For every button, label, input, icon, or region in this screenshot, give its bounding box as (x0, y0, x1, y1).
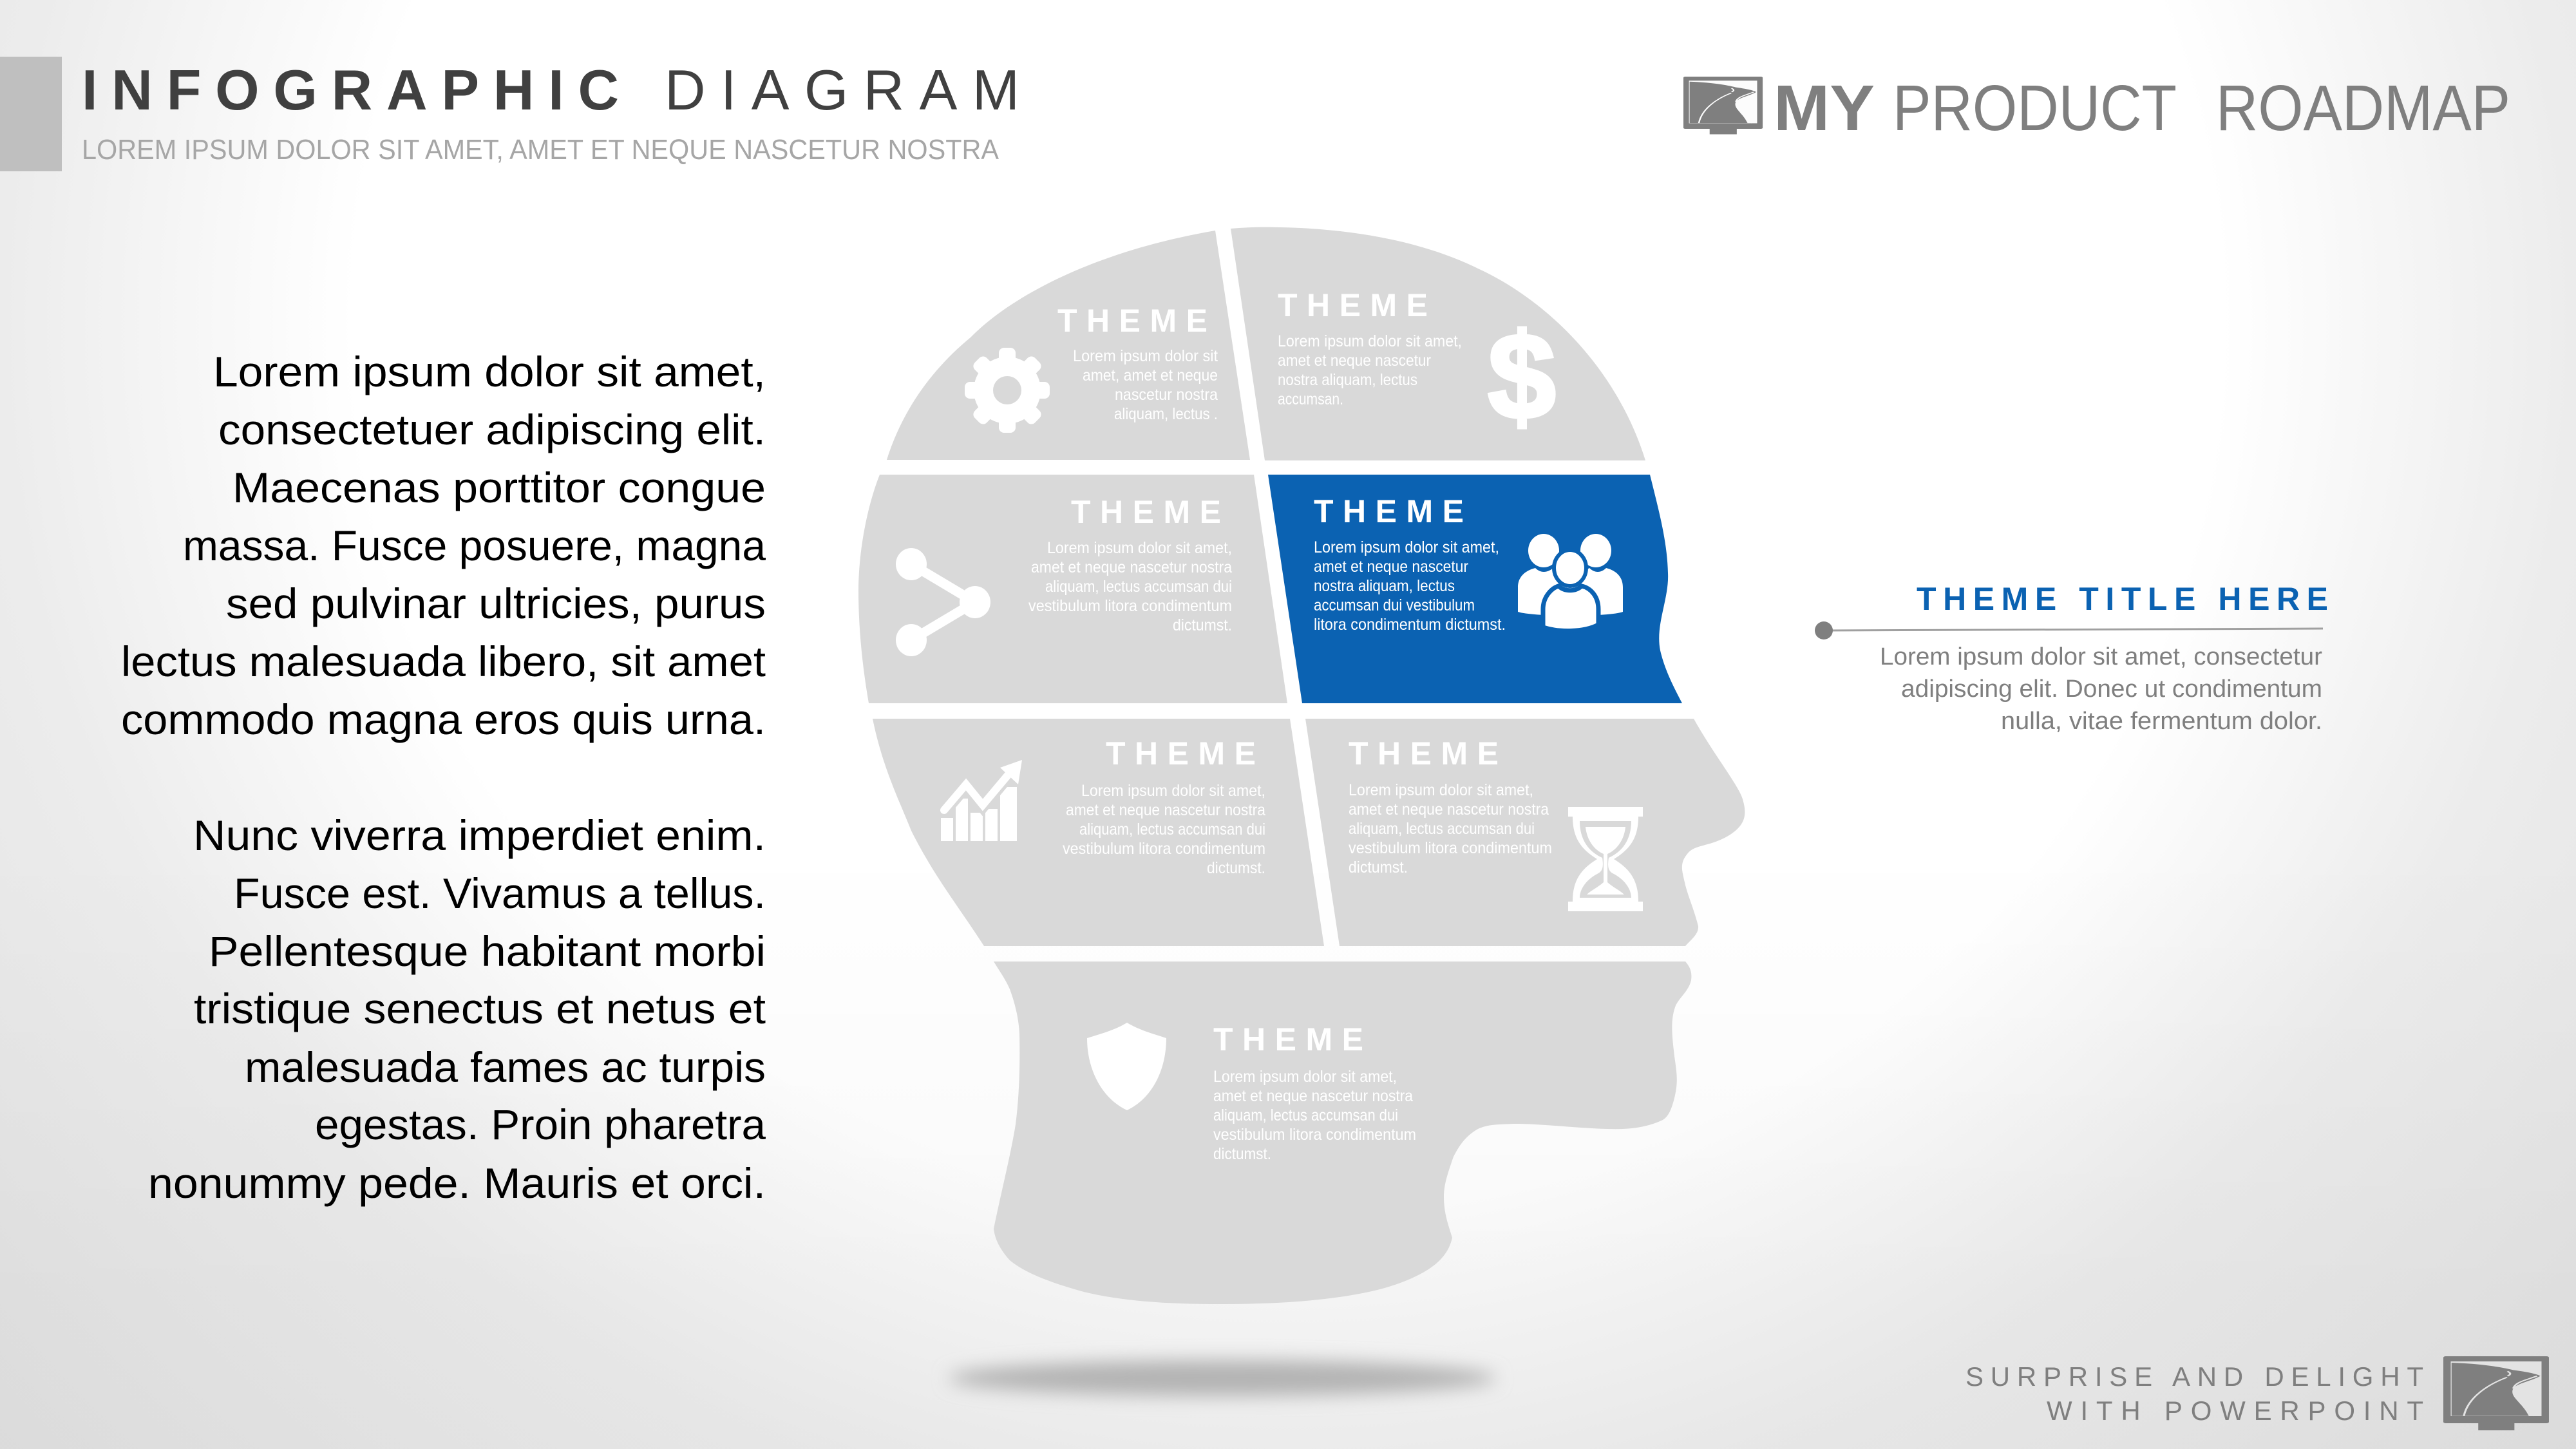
left text block: Fusce est. Vivamus a tellus. (234, 869, 766, 917)
title: DIAGRAM (665, 58, 1019, 122)
body text (1073, 347, 1218, 423)
body text (1028, 539, 1232, 634)
heading: THEME (1106, 735, 1256, 772)
left text block: malesuada fames ac turpis (245, 1043, 766, 1091)
body text: Lorem ipsum dolor sit amet, (1349, 781, 1533, 799)
callout connector (1815, 621, 2323, 639)
panel: theme share (858, 475, 1287, 703)
logo wordmark: PRODUCT (1893, 72, 2177, 144)
title (82, 58, 1019, 122)
body text: amet et neque nascetur nostra (1031, 558, 1232, 576)
left text block: Nunc viverra imperdiet enim. (193, 811, 766, 859)
body text: vestibulum litora condimentum (1063, 840, 1265, 858)
left text block: nonummy pede. Mauris et orci. (148, 1159, 766, 1207)
footer icon: road billboard (2443, 1356, 2549, 1430)
segment: middle right blue (1268, 475, 1682, 703)
body text: dictumst. (1173, 616, 1232, 634)
icon: gear (965, 348, 1050, 433)
body text: amet et neque nascetur (1314, 558, 1468, 576)
body text: Lorem ipsum dolor sit amet, (1081, 782, 1265, 800)
body text (1213, 1068, 1416, 1163)
heading: THEME (1057, 303, 1208, 339)
panel: theme gear (887, 231, 1250, 460)
logo: my product roadmap (1683, 72, 2510, 144)
body text: Lorem ipsum dolor sit amet, (1047, 539, 1232, 557)
footer tagline: SURPRISE AND DELIGHT (1965, 1361, 2423, 1392)
left text block: Lorem ipsum dolor sit amet, (213, 348, 766, 395)
left text block: massa. Fusce posuere, magna (183, 522, 766, 569)
body text: amet et neque nascetur (1278, 352, 1431, 370)
body text: nascetur nostra (1115, 386, 1218, 404)
body text: dictumst. (1207, 859, 1265, 877)
body text: Lorem ipsum dolor sit (1073, 347, 1218, 365)
heading: THEME (1314, 493, 1464, 529)
callout body text: adipiscing elit. Donec ut condimentum (1901, 676, 2322, 703)
segment: middle left (858, 475, 1287, 703)
body text (1349, 781, 1552, 876)
heading: THEME (1349, 735, 1499, 772)
segment: lower left (873, 719, 1324, 946)
callout body text: nulla, vitae fermentum dolor. (2001, 708, 2322, 735)
icon: growth chart (941, 760, 1022, 841)
body text: vestibulum litora condimentum (1213, 1126, 1416, 1144)
left text block: Pellentesque habitant morbi (209, 927, 766, 975)
left text block: tristique senectus et netus et (194, 985, 766, 1032)
panel: theme people (highlighted) (1268, 475, 1682, 703)
heading: THEME (1213, 1021, 1363, 1057)
body text: vestibulum litora condimentum (1349, 839, 1552, 857)
left text block: Maecenas porttitor congue (232, 464, 766, 511)
left text block: lectus malesuada libero, sit amet (121, 638, 766, 685)
subtitle: LOREM IPSUM DOLOR SIT AMET, AMET ET NEQUE NASCETUR NOSTRA (82, 134, 999, 166)
callout body text (1880, 643, 2322, 735)
body text: litora condimentum dictumst. (1314, 616, 1506, 634)
body text: accumsan. (1278, 390, 1343, 408)
panel: theme hourglass (1305, 719, 1745, 946)
title: INFOGRAPHIC (82, 58, 619, 122)
body text: dictumst. (1349, 858, 1408, 876)
body text: aliquam, lectus accumsan dui (1349, 820, 1535, 838)
icon: share (896, 548, 990, 656)
segment: jaw and neck (994, 961, 1691, 1304)
panel: theme chart (873, 719, 1324, 946)
heading: THEME (1071, 494, 1221, 530)
left text block: commodo magna eros quis urna. (121, 696, 766, 743)
icon: hourglass (1568, 807, 1643, 911)
body text: Lorem ipsum dolor sit amet, (1213, 1068, 1397, 1086)
segment: top right (1231, 227, 1645, 460)
body text: aliquam, lectus accumsan dui (1079, 820, 1265, 838)
logo wordmark: MY (1774, 72, 1875, 144)
body text (1278, 332, 1462, 408)
body text: aliquam, lectus accumsan dui (1213, 1106, 1398, 1124)
body text: nostra aliquam, lectus (1314, 577, 1455, 595)
icon: dollar: $ (1488, 308, 1556, 445)
footer tagline: WITH POWERPOINT (2047, 1396, 2423, 1426)
segment: lower right (1305, 719, 1745, 946)
icon: people (1518, 534, 1623, 631)
callout heading: THEME TITLE HERE (1917, 581, 2328, 617)
left text block (121, 348, 766, 1207)
body text: aliquam, lectus . (1114, 405, 1218, 423)
body text: Lorem ipsum dolor sit amet, (1314, 538, 1499, 556)
footer tagline (1965, 1361, 2423, 1426)
body text (1314, 538, 1506, 634)
body text: Lorem ipsum dolor sit amet, (1278, 332, 1462, 350)
head shadow (949, 1360, 1496, 1396)
body text: accumsan dui vestibulum (1314, 596, 1475, 614)
icon: road billboard (1683, 77, 1763, 135)
left text block: sed pulvinar ultricies, purus (226, 580, 766, 627)
body text: nostra aliquam, lectus (1278, 371, 1417, 389)
left text block: egestas. Proin pharetra (315, 1101, 766, 1148)
callout body text: Lorem ipsum dolor sit amet, consectetur (1880, 643, 2322, 670)
body text: amet, amet et neque (1083, 366, 1218, 384)
body text: amet et neque nascetur nostra (1349, 800, 1549, 819)
logo wordmark (1774, 72, 2510, 144)
body text: vestibulum litora condimentum (1028, 597, 1232, 615)
segment: top left (887, 231, 1250, 460)
body text: aliquam, lectus accumsan dui (1045, 578, 1232, 596)
body text: dictumst. (1213, 1145, 1271, 1163)
heading: THEME (1278, 287, 1428, 323)
panel: theme dollar (1231, 227, 1645, 460)
logo wordmark: ROADMAP (2216, 72, 2510, 144)
body text (1063, 782, 1265, 877)
left text block: consectetuer adipiscing elit. (218, 406, 766, 453)
body text: amet et neque nascetur nostra (1066, 801, 1265, 819)
body text: amet et neque nascetur nostra (1213, 1087, 1413, 1105)
title accent bar (0, 57, 62, 171)
callout: theme title here (1815, 581, 2328, 735)
icon: shield (1087, 1023, 1166, 1110)
panel: theme shield (994, 961, 1691, 1304)
